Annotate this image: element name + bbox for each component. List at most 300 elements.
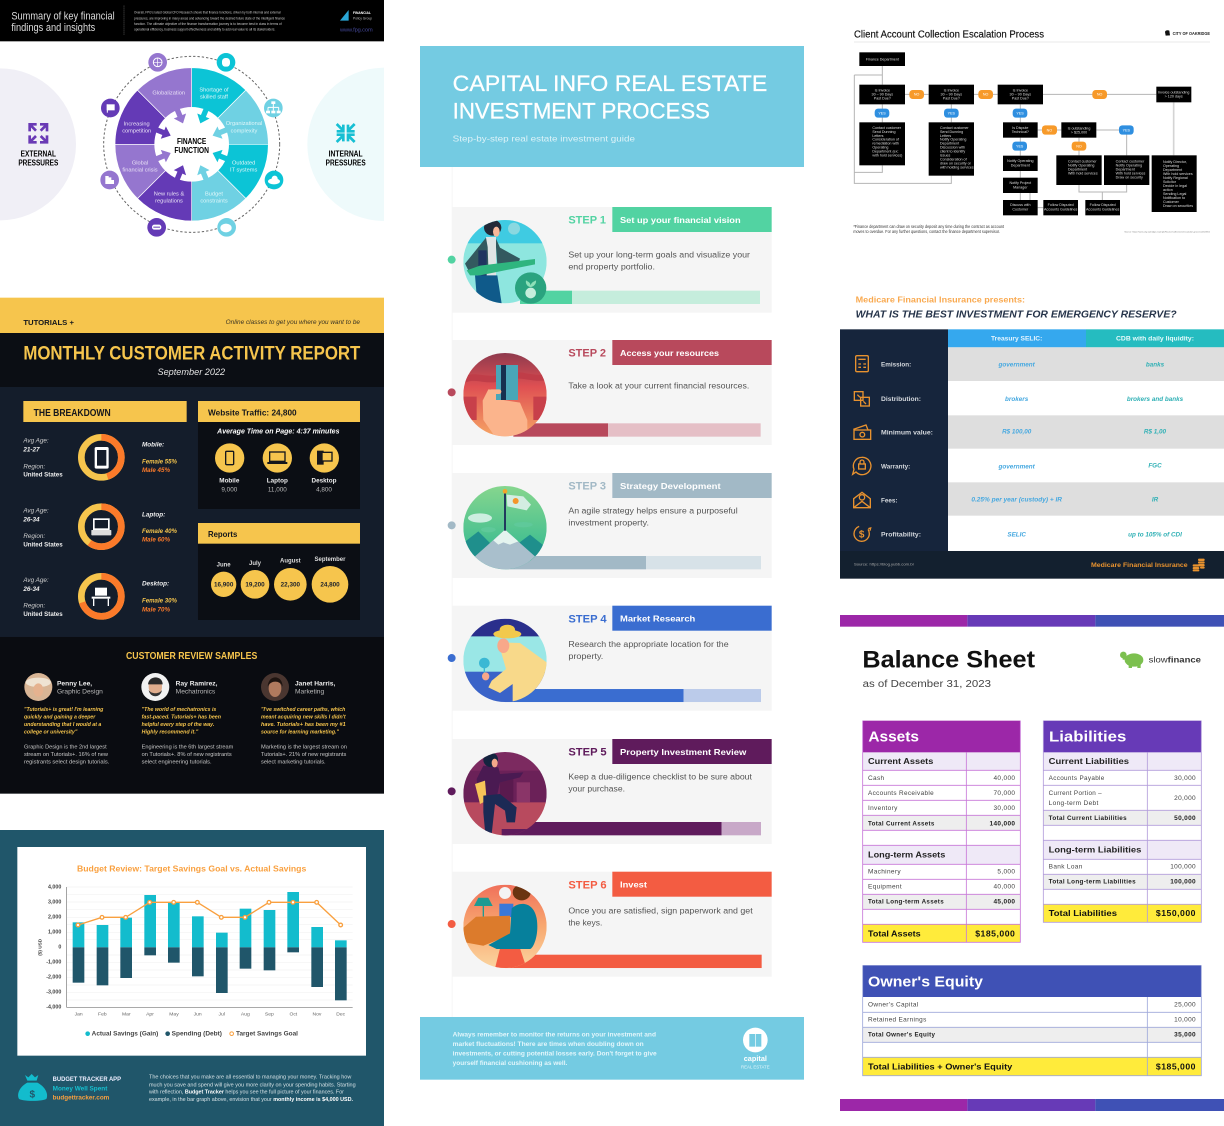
desktop donut [81,576,121,616]
breakdown labels: Region: [23,533,45,540]
icon: coins [1193,559,1205,571]
action lists: Department (ex: [872,150,899,154]
pill labels: NO [914,93,920,97]
review: Penny Lee: Graphic Design is the 2nd largest [24,744,107,750]
action lists: Notify Operating [940,138,966,142]
y axis labels: 4,000 [48,885,61,891]
action lists: Contact customer [1116,160,1145,164]
y axis labels: 1,000 [48,930,61,936]
box labels: Past Due? [874,97,891,101]
review: Ray Ramirez: select engineering tutorials. [142,759,212,765]
wheel diagram: Shortage of [199,87,229,93]
capital logo [741,1028,770,1070]
action lists: Department [940,142,959,146]
action lists: issues [940,154,951,158]
city logo: CITY OF OAKRIDGE [1173,31,1210,36]
equity table [863,965,1201,1076]
liabilities table: 30,000 [1174,775,1196,782]
wheel diagram: regulations [155,198,183,204]
y axis labels: 3,000 [48,900,61,906]
header bar: FINANCIAL [353,11,371,15]
action lists: Consideration of [872,138,900,142]
step 1: end property portfolio. [568,262,655,271]
review: Penny Lee: Graphic Design [57,688,103,695]
action lists: Draw on security [1116,176,1143,180]
box labels: Accounts Guidelines [1086,207,1119,211]
chart card: ($) USD [38,938,43,956]
wheel diagram: skilled staff [200,94,228,100]
wheel diagram: New rules & [154,191,184,197]
action lists: Decide in legal [1163,184,1187,188]
assets table: Inventory [868,805,898,812]
review: Ray Ramirez: "The world of mechatronics is [142,707,216,713]
review: Janet Harris: Tutorials+. 21% of new registrants [261,752,346,758]
pill labels [878,93,1131,148]
wheel diagram: Outdated [232,160,255,166]
breakdown labels: Male 70% [142,606,170,613]
CDB values: banks [1146,361,1165,368]
liabilities table: Total Long-term Liabilities [1049,879,1136,886]
review: Ray Ramirez [141,673,234,765]
step 5: your purchase. [568,785,625,794]
box labels: Notify Operating [1007,159,1034,163]
review: Ray Ramirez: fast-paced. Tutorials+ has been [142,715,222,721]
description paragraph: example, in the bar graph above, envision that your monthly income is $4,000 USD. [149,1097,353,1103]
CDB values: brokers and banks [1127,396,1184,403]
box labels: Accounts Guidelines [1044,207,1077,211]
review: Ray Ramirez: Mechatronics [176,688,216,695]
action lists: Contact customer [1068,160,1097,164]
internal pressures circle [308,68,384,221]
assets table: 5,000 [997,868,1015,875]
month labels: Oct [289,1012,298,1018]
y axis labels: -1,000 [46,960,61,966]
step 2: Take a look at your current financial resources. [568,381,749,390]
month labels: Dec [336,1012,346,1018]
review: Penny Lee [24,673,110,765]
action lists: Notify Regional [1163,176,1188,180]
action lists [872,126,1193,208]
box labels: Is Invoice [1013,89,1028,93]
external pressures circle: EXTERNAL [21,150,56,159]
step 5 [448,739,772,844]
table footer: Source: https://blog.yubb.com.br [854,563,915,567]
report background and header: September 2022 [157,367,225,377]
action lists: Notify Operating [1116,164,1142,168]
action lists: With hold services [1163,172,1193,176]
description paragraph: much you save and spend will give you more clarity on your spending habits. Starting [149,1082,356,1088]
breakdown labels: 21-27 [22,447,40,454]
action lists: remediation with [872,142,899,146]
panel: capital real estate investment process [420,46,804,1080]
assets table: Accounts Receivable [868,790,934,797]
wheel diagram: complexity [231,128,258,134]
box labels: Is Invoice [875,89,890,93]
assets table: Total Assets [868,928,921,938]
connector lines [854,66,1174,208]
review: Penny Lee: understanding that I would at a [24,722,101,728]
box labels: 30 – 90 Days [872,93,893,97]
box labels: Past Due? [943,97,960,101]
month labels: Jul [218,1012,225,1018]
header: CAPITAL INFO REAL ESTATE [453,71,767,96]
website traffic panel: 4,800 [316,487,332,494]
table footer [840,551,1224,579]
report background and header: Online classes to get you where you want to be [226,320,361,326]
breakdown labels: Region: [23,463,45,470]
equity table: Total Liabilities + Owner's Equity [868,1062,1013,1072]
report background and header: TUTORIALS + [23,318,75,327]
breakdown labels: United States [23,611,63,618]
reports bubbles panel: 16,900 [214,582,234,589]
reports bubbles panel [198,523,360,620]
NO decision pills [909,90,1107,151]
assets table: Assets [868,730,919,746]
action lists: draw on security or [940,162,972,166]
website traffic panel: Laptop [267,478,288,485]
row labels: Minimum value: [881,429,933,436]
panel: emergency reserve comparison table: $ [859,529,865,540]
assets table: $185,000 [975,928,1015,938]
box labels: Follow Disputed [1090,203,1116,207]
box labels: Notify Project [1009,181,1031,185]
spending bars [73,947,347,1000]
reports bubbles panel: June [217,563,231,569]
breakdown labels: Mobile: [142,442,164,449]
report background and header [0,298,384,794]
website traffic panel [198,401,360,509]
header bar: Overall, FPG's latest Global CFO Research shows that finance functions, driven by both internal and external [134,10,281,14]
header: INVESTMENT PROCESS [453,99,710,124]
box labels: 30 – 90 Days [941,93,962,97]
wheel diagram: FINANCE [177,137,207,146]
month labels: Apr [146,1012,154,1018]
YES decision pills [875,109,1134,151]
equity table: 10,000 [1174,1017,1196,1024]
assets table [863,721,1020,942]
header bar: findings and insights [11,22,96,34]
liabilities table: Total Liabilities [1049,908,1117,918]
Treasury SELIC values: brokers [1005,396,1029,403]
customer review samples: CUSTOMER REVIEW SAMPLES [126,651,258,662]
breakdown labels: Region: [23,603,45,610]
box labels: Is Invoice [944,89,959,93]
header bar: pressures, are improving in many areas and advancing toward the desired future state of the intelligent finance [134,16,285,20]
equity table: 35,000 [1174,1032,1196,1039]
step 5: STEP 5 [568,747,607,759]
box labels: Manager [1013,185,1028,189]
Treasury SELIC values: SELIC [1007,532,1026,539]
footnote [853,224,1210,234]
app branding: budgettracker.com [53,1095,110,1102]
CDB values: up to 105% of CDI [1128,532,1182,539]
illustration: mountain with flag [463,486,547,570]
step 6: the keys. [568,918,602,927]
assets table: Long-term Assets [868,850,946,860]
pill labels: YES [948,111,956,115]
wheel diagram: Organizational [226,121,262,127]
reports bubbles panel: 22,300 [281,582,300,589]
y axis labels: -4,000 [46,1005,61,1011]
app branding [53,1076,121,1102]
box labels: > 120 days [1165,95,1183,99]
table heading: Medicare Financial Insurance presents: [856,296,1025,305]
step 3: STEP 3 [568,481,606,493]
description paragraph: The choices that you make are all essential to managing your money. Tracking how [149,1075,351,1081]
wheel diagram: Global [132,160,148,166]
step 3 [448,473,772,578]
review: Penny Lee: Penny Lee, [57,681,92,688]
month labels: Sep [265,1012,274,1018]
reports bubbles panel: 19,200 [245,582,265,589]
box labels: Discuss with [1010,203,1030,207]
action lists: Solicitor [1163,180,1177,184]
row icons [853,356,871,541]
month labels: Jan [75,1012,83,1018]
month labels: Aug [241,1012,250,1018]
review: Janet Harris: select marketing tutorials. [261,759,326,765]
wheel diagram: FUNCTION [174,146,209,155]
internal pressures circle: PRESSURES [326,159,366,168]
equity table: Owner's Capital [868,1002,919,1009]
column headers: CDB with daily liquidity: [1116,336,1194,343]
breakdown labels: 26-34 [22,586,40,593]
row backgrounds [948,347,1224,516]
liabilities table [1043,721,1201,922]
liabilities table: Long-term Debt [1049,800,1099,807]
process boxes [859,52,1197,215]
review: Ray Ramirez: helpful every step of the way. [142,722,215,728]
action lists: With hold services [1116,172,1146,176]
Treasury SELIC values: government [998,361,1036,368]
step 1: Set up your long-term goals and visualize your [568,250,750,259]
breakdown labels: Female 55% [142,458,177,465]
the breakdown section [22,401,187,618]
legend: Target Savings Goal [236,1032,298,1038]
y axis labels: 0 [58,945,61,951]
review: Janet Harris: source for learning marketing." [261,730,339,736]
y axis labels: -3,000 [46,990,61,996]
breakdown labels: United States [23,541,63,548]
reports bubbles panel: August [280,559,301,565]
liabilities table: 100,000 [1170,863,1196,870]
CDB values: R$ 1,00 [1144,429,1167,436]
reports bubbles panel: July [249,561,262,567]
website traffic panel: Desktop [312,478,337,485]
review: Janet Harris: "I've switched career paths, which [261,707,346,713]
panel: balance sheet [840,615,1224,942]
equity table: Retained Earnings [868,1017,927,1024]
breakdown labels: Avg Age: [22,438,49,445]
balance sheet title: Balance Sheet [862,648,1035,674]
step 5: Keep a due-diligence checklist to be sure about [568,773,753,782]
footer note and logo: Always remember to monitor the returns on your investment and [453,1032,656,1039]
Treasury SELIC values: 0.25% per year (custody) + IR [971,496,1062,503]
description paragraph: with reflection, Budget Tracker helps you see the full picture of your finances. For [148,1090,344,1096]
step 4: STEP 4 [568,613,607,625]
review: Janet Harris [261,673,347,765]
pill labels: NO [1076,144,1082,148]
assets table: 40,000 [993,775,1015,782]
icon: growth coin [515,272,546,304]
box labels: Invoice outstanding [1158,91,1189,95]
action lists: Contact customer [872,126,902,130]
breakdown labels: United States [23,472,63,479]
pill labels: YES [1016,144,1024,148]
wheel diagram: Globalization [152,91,185,97]
action lists: Operating [872,146,888,150]
wheel diagram: Increasing [124,121,150,127]
assets table: Machinery [868,868,901,875]
CDB values: FGC [1148,463,1162,470]
step 2: STEP 2 [568,348,606,360]
action lists: Contact customer [940,126,969,130]
illustration: researcher with magnifier [463,619,547,702]
pill labels: YES [1123,128,1131,132]
row labels: Distribution: [881,396,921,403]
box labels: Department [1011,163,1030,167]
step 6: Invest [620,880,647,890]
review: Penny Lee: "Tutorials+ is great! I'm learning [24,707,104,713]
city logo [1165,30,1210,36]
step 4 [448,606,772,711]
laptop donut [81,507,121,547]
Treasury SELIC values: government [998,464,1036,471]
pill labels: NO [1047,128,1052,132]
equity table: $185,000 [1156,1062,1196,1072]
icon: money bag [18,1074,47,1101]
liabilities table: Accounts Payable [1049,775,1105,782]
equity table: 25,000 [1174,1002,1196,1009]
row labels: Fees: [881,498,898,505]
CDB values: IR [1152,496,1159,503]
icon: outward arrows [30,124,47,142]
footnote: *Finance department can draw on security deposit any time during the contract as account [853,224,1005,229]
breakdown labels: 26-34 [22,516,40,523]
header: Step-by-step real estate investment guide [453,134,635,144]
header [420,46,804,1017]
top color bar [840,615,1224,627]
panel: emergency reserve comparison table [840,296,1224,579]
legend [85,1031,298,1038]
action lists: action [1163,188,1173,192]
y axis labels [46,885,61,1011]
the breakdown section: THE BREAKDOWN [34,408,111,419]
action lists: Letters [940,134,951,138]
month labels: Nov [313,1012,322,1018]
app branding: BUDGET TRACKER APP [53,1076,121,1083]
box labels: Is Dispute [1012,126,1028,130]
wheel diagram [104,56,280,232]
legend: Spending (Debt) [172,1032,222,1038]
gain bars [73,892,347,947]
review: Penny Lee: quickly and gaining a deeper [24,715,96,721]
reports bubbles panel: Reports [208,529,237,539]
box labels: Is outstanding [1068,127,1090,131]
wheel diagram: competition [122,128,151,134]
step 3: Strategy Development [620,481,721,491]
step 3: investment property. [568,518,649,527]
breakdown labels: Avg Age: [22,577,49,584]
action lists: Operating [1163,164,1179,168]
action lists: Consideration of [940,158,968,162]
Treasury SELIC values: R$ 100,00 [1002,429,1032,436]
liabilities table: 20,000 [1174,795,1196,802]
assets table: Cash [868,775,885,782]
assets table: 45,000 [993,899,1015,906]
review: Ray Ramirez: on Tutorials+. 8% of new registrants [142,752,232,758]
breakdown labels: Male 60% [142,537,170,544]
action lists: With hold services [1068,172,1098,176]
table heading: WHAT IS THE BEST INVESTMENT FOR EMERGENCY RESERVE? [856,309,1177,320]
liabilities table: Total Current Liabilities [1049,815,1127,822]
review: Ray Ramirez: Highly recommend it." [142,730,199,736]
action lists: Department [1116,168,1135,172]
website traffic panel: Mobile [219,478,240,485]
y axis labels: 2,000 [48,915,61,921]
action lists: Send Dunning [940,130,963,134]
header bar [0,0,384,41]
breakdown labels: Female 40% [142,528,177,535]
box labels: > $25,000 [1071,131,1087,135]
breakdown labels: Laptop: [142,511,165,518]
action lists: with holding services [940,166,974,170]
column headers: Treasury SELIC: [991,336,1042,343]
step 4: Market Research [620,614,695,624]
assets table: Total Current Assets [868,820,935,827]
slowfinance logo: slowfinance [1149,654,1201,664]
panel: monthly customer activity report [0,298,384,794]
equity table: Total Owner's Equity [868,1032,935,1039]
box labels: Past Due? [1012,97,1029,101]
capital logo: capital [744,1054,767,1063]
step 6: STEP 6 [568,879,607,891]
reports bubbles panel: September [315,557,346,563]
website traffic panel: Average Time on Page: 4:37 minutes [216,428,340,435]
illustration: woman with coin [463,220,547,304]
action lists: Letters [872,134,884,138]
icon: money bag: $ [30,1089,36,1100]
header bar: operational efficiency, business support effectiveness and ability to add real value to all its stakeholders. [134,27,275,31]
month labels: May [169,1012,179,1018]
Treasury SELIC values [971,361,1062,539]
action lists: client to identify [940,150,965,154]
step 5: Property Investment Review [620,747,747,757]
row labels: Emission: [881,362,911,369]
action lists: Department [1163,168,1182,172]
table heading [856,296,1177,320]
row labels: Profitability: [881,532,921,539]
panel: owner's equity [840,965,1224,1111]
step 4: property. [568,652,603,661]
slowfinance logo [1120,652,1201,668]
liabilities table: Liabilities [1049,730,1126,746]
wheel diagram: constraints [200,198,228,204]
customer review samples [24,651,347,765]
reports bubbles panel: 24,800 [320,582,340,589]
review: Janet Harris: meant acquiring new skills I didn't [261,715,347,721]
action lists: Send Dunning [872,130,896,134]
footer note and logo: market fluctuations! There are times when doubling down on [453,1041,644,1048]
website traffic panel: 9,000 [221,487,238,494]
row labels: Warranty: [881,464,910,471]
step 3: An agile strategy helps ensure a purposeful [568,506,738,515]
box labels: 30 – 90 Days [1010,93,1031,97]
flowchart title: Client Account Collection Escalation Process [854,29,1044,40]
box labels [866,57,1189,211]
capital logo: REAL ESTATE [741,1065,770,1070]
footer note and logo: investments, or cutting potential losses early. Don't forget to give [453,1050,657,1057]
